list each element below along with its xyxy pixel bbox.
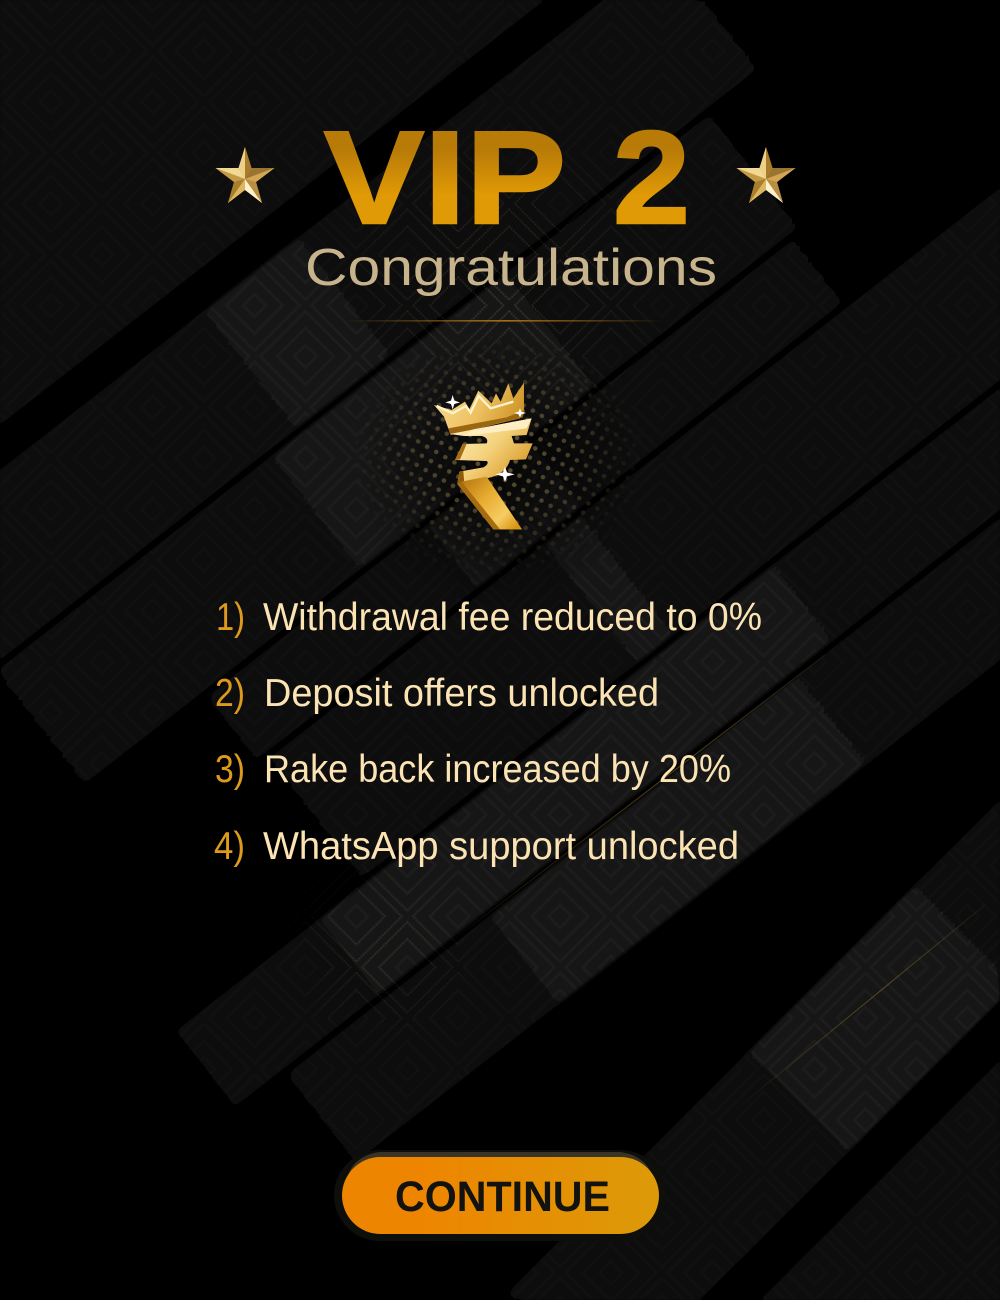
halftone glow [364,345,632,565]
button: continue [334,1150,666,1241]
item 1: Withdrawal fee reduced to 0% [263,596,762,639]
icon: left star [216,147,274,203]
rupee top highlight [464,418,532,436]
item 4: WhatsApp support unlocked [263,825,739,868]
rupee leg [462,477,522,529]
item 3: Rake back increased by 20% [264,748,731,791]
icon: right star [736,147,796,203]
benefits list [214,596,762,868]
subtitle: Congratulations: Congratulations [305,239,717,297]
item 2: Deposit offers unlocked [264,672,659,715]
item 1: 1) [216,596,245,639]
icon: crowned rupee [434,383,533,529]
rupee shading [455,444,467,460]
item 4: 4) [214,825,245,868]
item 2: 2) [215,672,245,715]
title: VIP 2: 2 [613,104,690,251]
button: continue: CONTINUE [395,1173,610,1221]
title: VIP 2: VIP [324,104,566,251]
rupee glyph [450,418,533,529]
item 3: 3) [215,748,245,791]
divider rule [345,320,665,322]
sparkles [445,395,526,482]
title: VIP 2 [324,104,690,251]
crown [434,383,524,435]
